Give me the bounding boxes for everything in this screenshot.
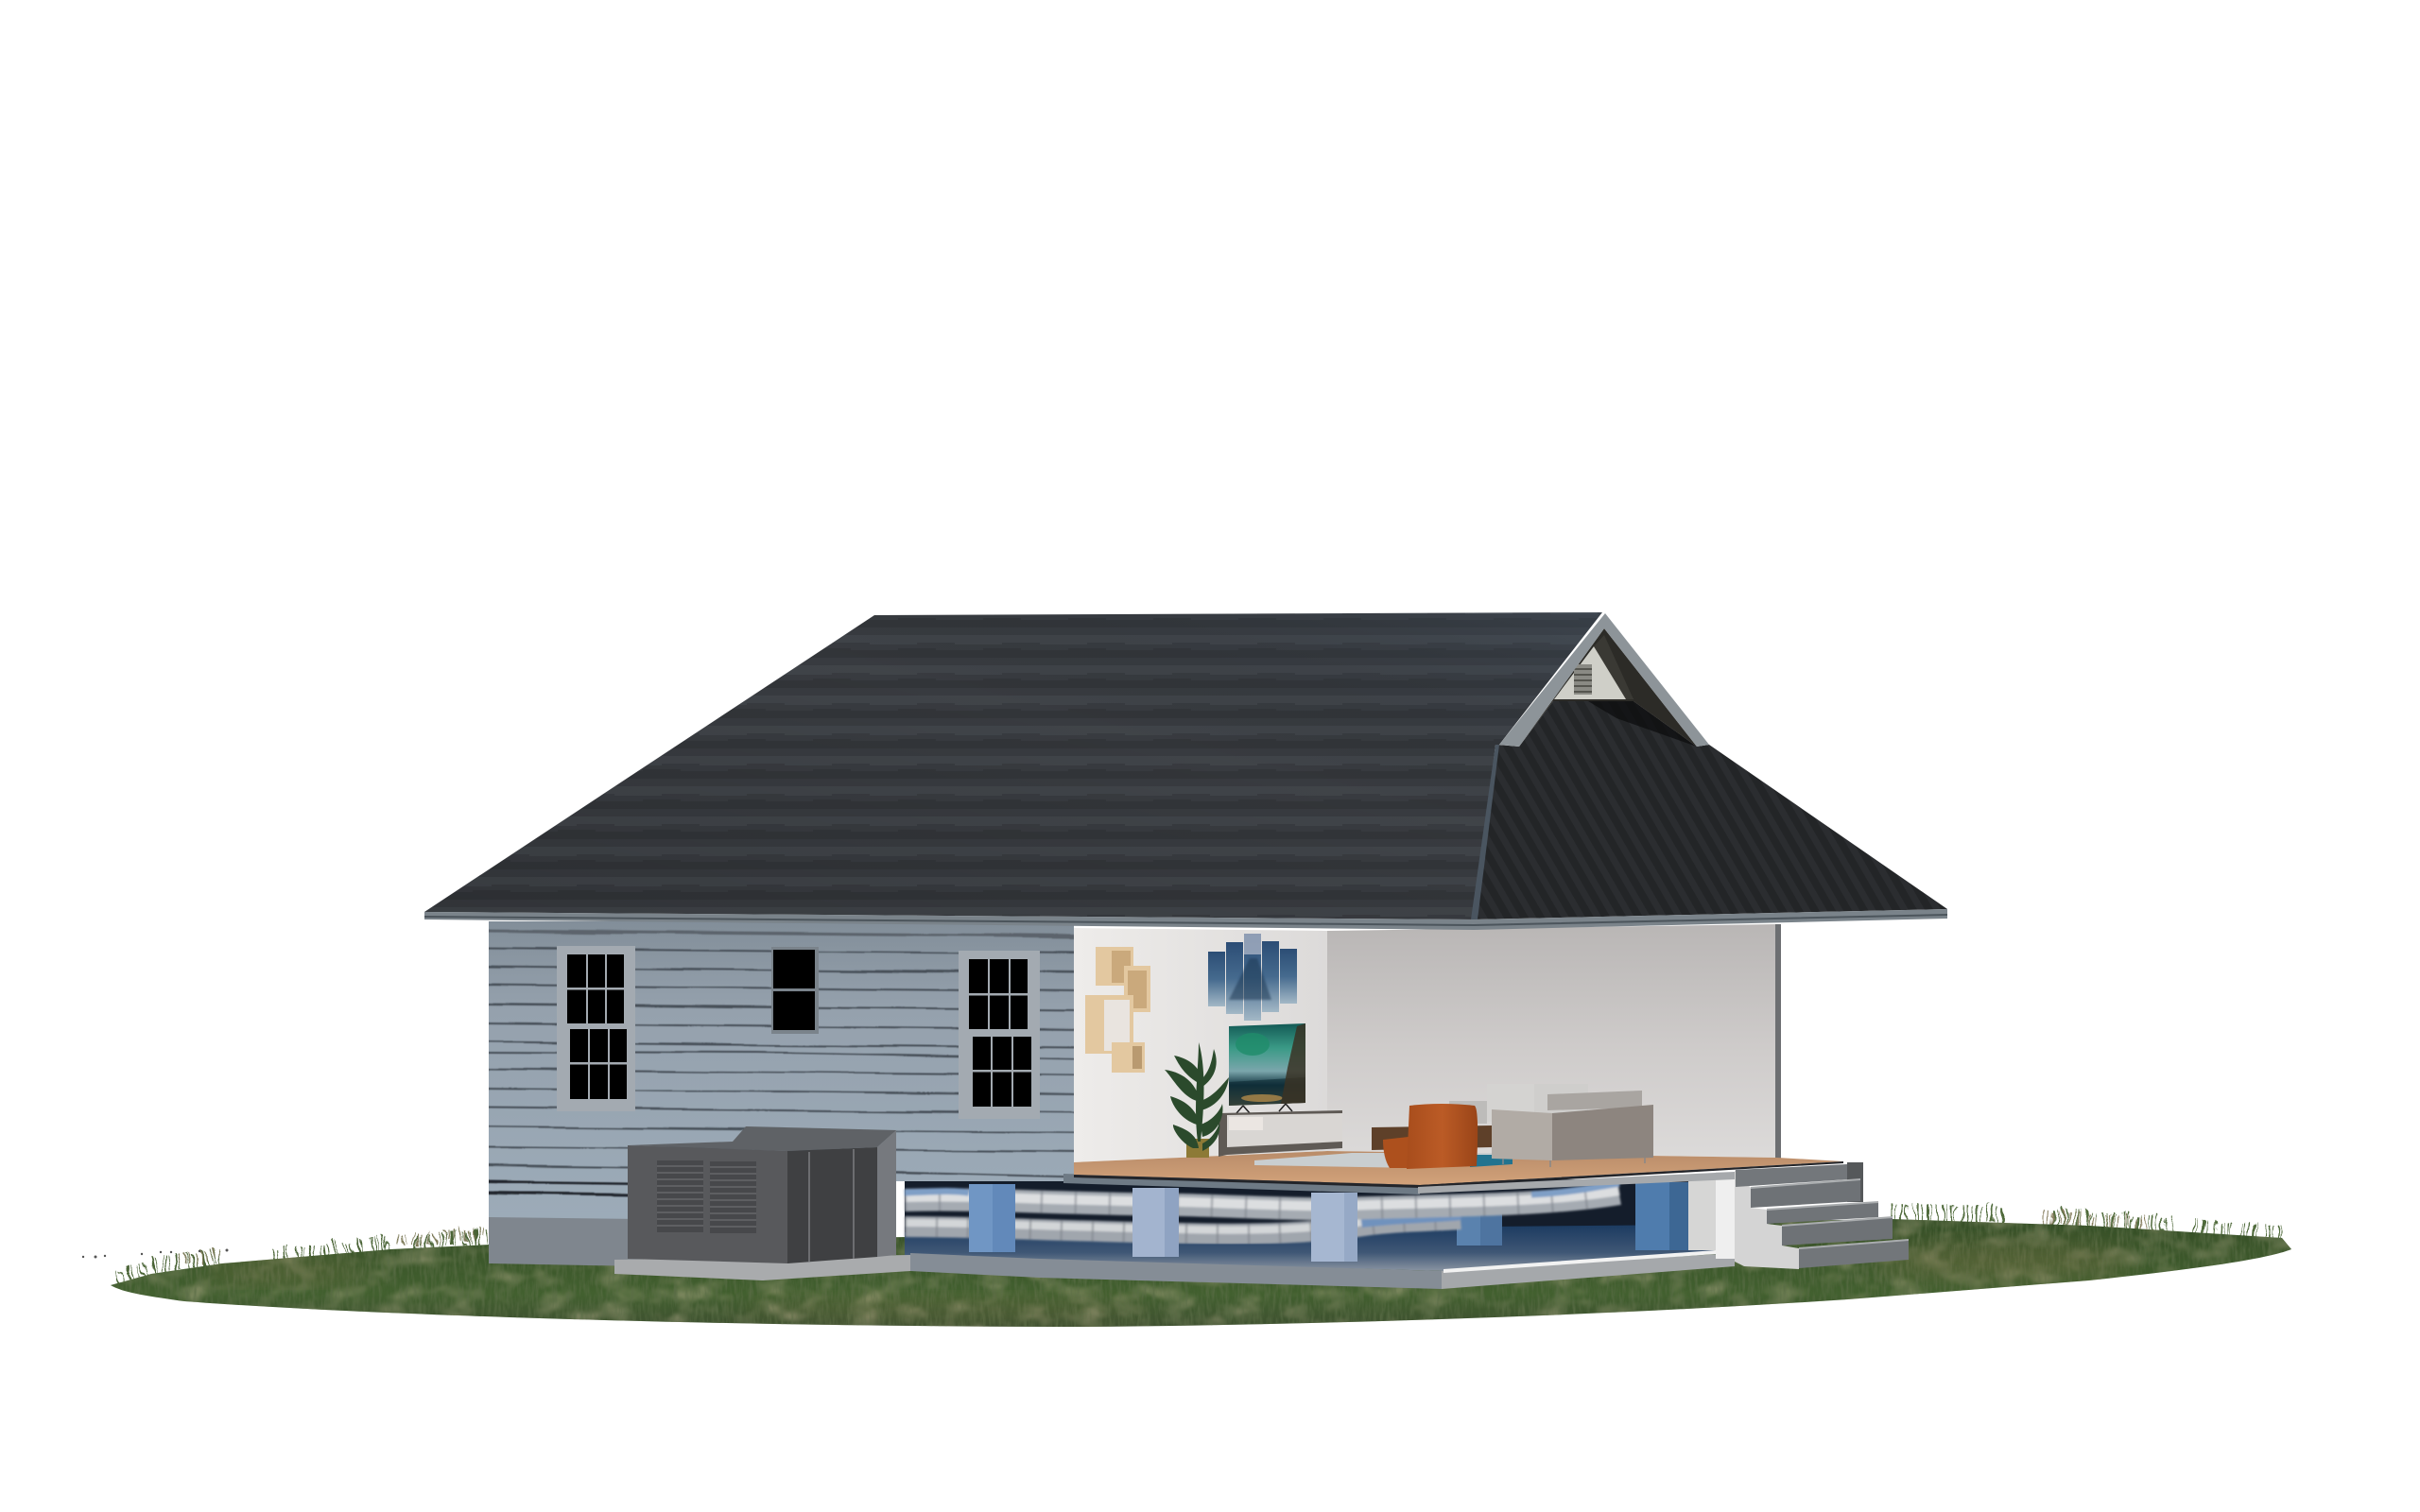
- louvers: [657, 1160, 756, 1233]
- step side wall: [1735, 1170, 1799, 1269]
- potted plant: [1165, 1042, 1229, 1158]
- orange armchair: [1383, 1104, 1478, 1169]
- back sofa: [1449, 1084, 1588, 1124]
- step 5: [1799, 1240, 1909, 1268]
- slab highlight: [1443, 1250, 1716, 1273]
- ductwork trim under floor: [1418, 1172, 1735, 1194]
- back right pier: [1635, 1182, 1688, 1250]
- seed specks: [82, 1249, 229, 1259]
- unit top: [628, 1126, 896, 1151]
- window: small centre: [771, 947, 819, 1034]
- step 3: [1767, 1202, 1878, 1224]
- unit side strip: [877, 1130, 896, 1257]
- television: [1229, 1023, 1305, 1113]
- back wall: [1327, 924, 1777, 1158]
- step 1: [1736, 1164, 1847, 1187]
- gable trim: [1499, 613, 1709, 747]
- lower duct: [905, 1213, 1461, 1234]
- concrete slab front left: [910, 1253, 1442, 1289]
- side wall: [1074, 928, 1327, 1162]
- front roof plane: [424, 612, 1602, 919]
- rug: [1254, 1153, 1503, 1168]
- crawl space floor: [905, 1225, 1716, 1271]
- grille bars: [808, 1149, 855, 1262]
- floor edge: [1074, 1161, 1843, 1188]
- siding lines: [482, 931, 1078, 1195]
- crawl space interior: [905, 1179, 1689, 1253]
- right hip roof plane: [1474, 701, 1947, 919]
- foundation end wall: [1688, 1172, 1735, 1259]
- upper duct: [905, 1183, 1619, 1209]
- room interior: [1063, 924, 1843, 1194]
- crawl space: [905, 1172, 1735, 1289]
- wooden floor: [1074, 1151, 1843, 1185]
- hip ridge: [1471, 745, 1499, 919]
- floating shelves: [1085, 947, 1150, 1073]
- insulated ducts: [905, 1183, 1619, 1234]
- front piers: [969, 1184, 1357, 1262]
- unit right face grille: [787, 1147, 877, 1263]
- front steps: [1735, 1162, 1909, 1269]
- gable vent wall: [1554, 635, 1634, 699]
- illustration: house cutaway on lawn: [81, 612, 2291, 1327]
- window: right double hung: [959, 951, 1040, 1119]
- grass lawn: [82, 1210, 2307, 1332]
- unit left face: [628, 1145, 787, 1263]
- concrete slab front right: [1442, 1253, 1735, 1289]
- roof: [424, 612, 1947, 930]
- corner post: [1775, 924, 1781, 1159]
- wall art: five panel mountain: [1208, 934, 1297, 1021]
- siding wall: [482, 921, 1078, 1266]
- step post: [1847, 1162, 1863, 1202]
- coffee table: [1372, 1125, 1492, 1150]
- concrete pad: [614, 1255, 910, 1280]
- grey sofa: [1492, 1091, 1653, 1167]
- eave fascia: [424, 909, 1947, 930]
- grass body: [111, 1219, 2291, 1327]
- outdoor hvac unit: [614, 1126, 910, 1280]
- back pier: [1457, 1208, 1502, 1246]
- media console: [1219, 1110, 1342, 1157]
- grass texture: [111, 1219, 2291, 1327]
- step 2: [1751, 1179, 1860, 1208]
- grass fringe along back edge: [118, 1213, 2286, 1278]
- gable shadow on roof: [1588, 701, 1697, 747]
- foundation base: [489, 1217, 643, 1266]
- step 4: [1782, 1217, 1893, 1246]
- window: left double hung: [557, 946, 635, 1111]
- dormer gable interior: [1519, 628, 1697, 747]
- step nosings: [1751, 1178, 1909, 1249]
- floor under-trim: [1063, 1174, 1420, 1194]
